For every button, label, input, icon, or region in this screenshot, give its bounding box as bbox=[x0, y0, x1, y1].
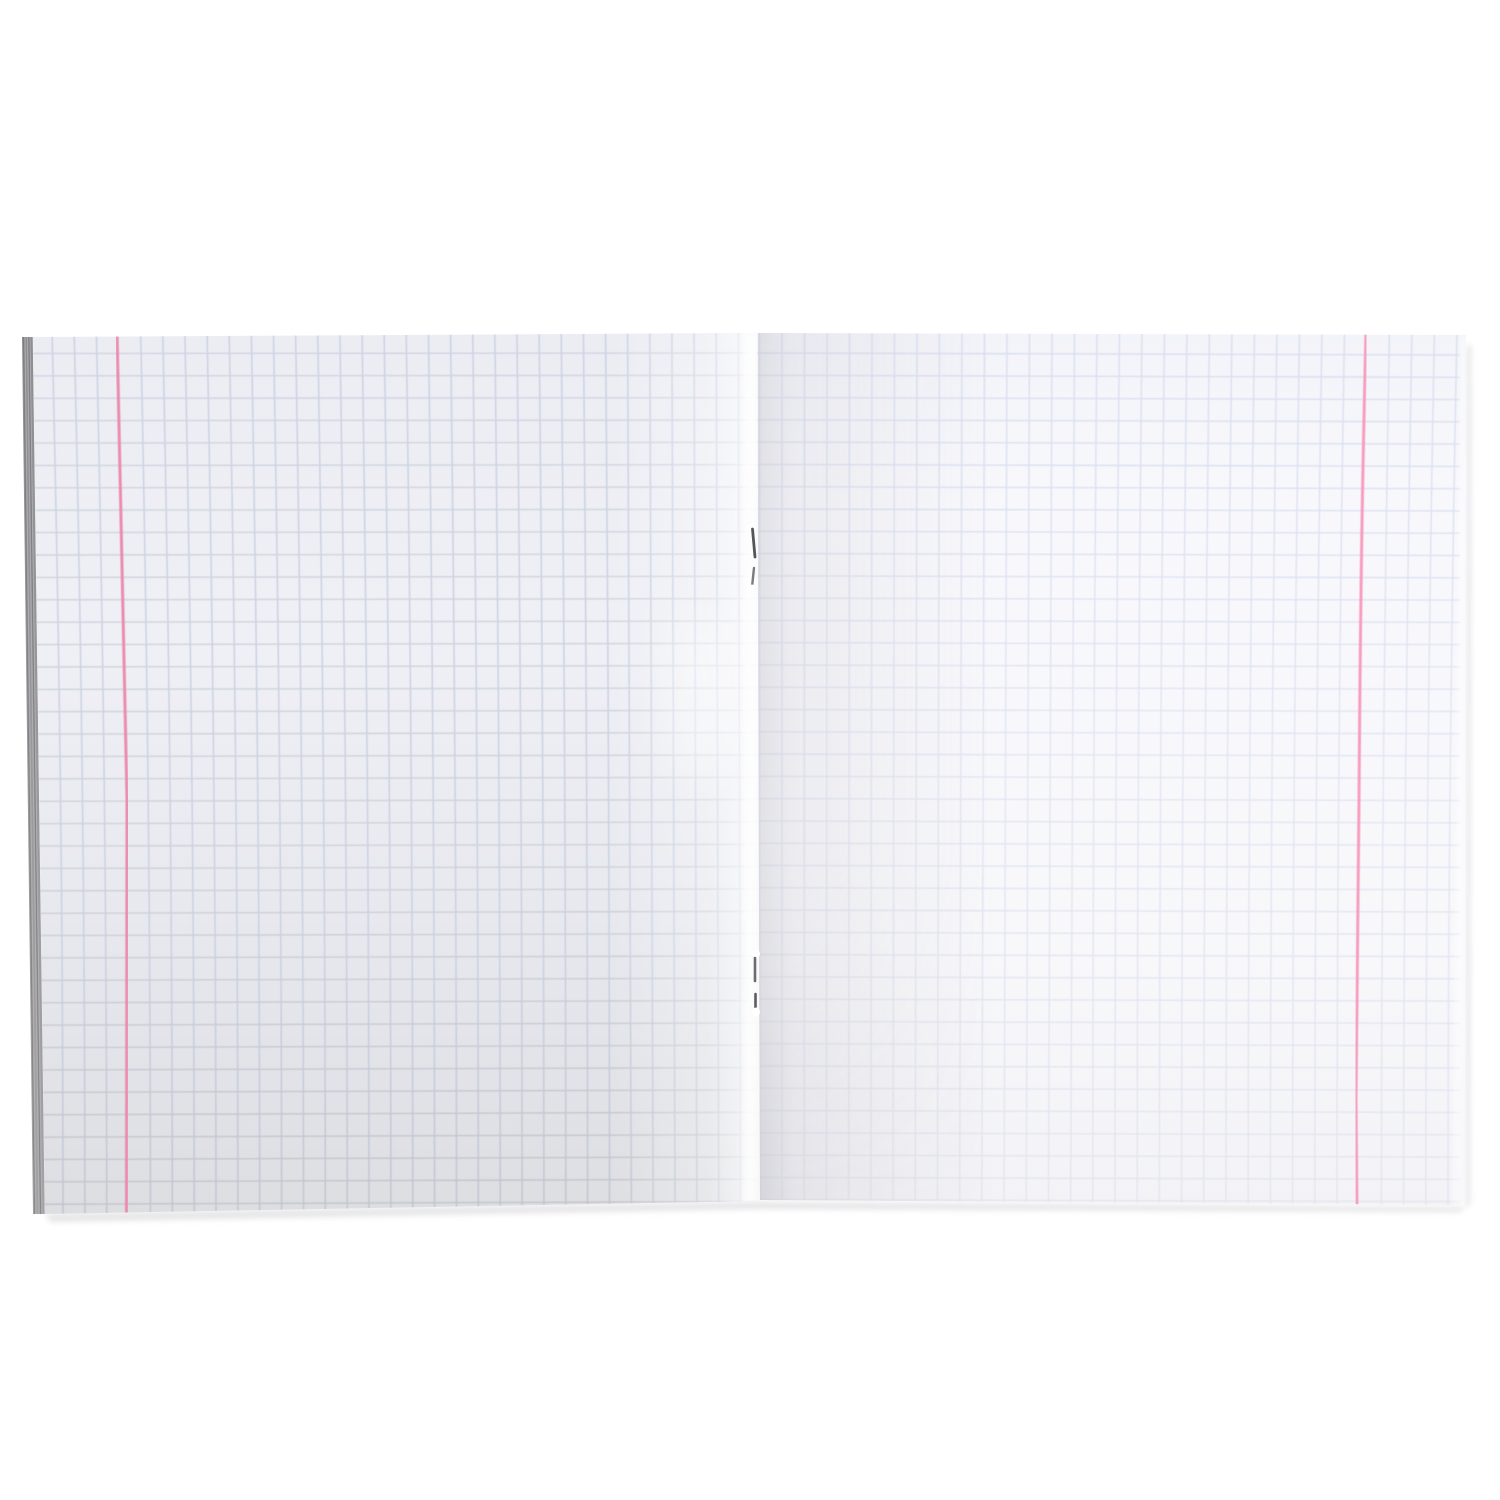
top staple bbox=[749, 524, 756, 592]
gutter highlight bbox=[660, 333, 760, 1202]
right page grid bbox=[757, 330, 1460, 1210]
illustration: open grid-paper notebook bbox=[22, 333, 1472, 1224]
white outer strip bbox=[1452, 335, 1466, 1205]
page stack edge bbox=[22, 337, 46, 1214]
left page margin line bbox=[117, 332, 127, 1220]
gutter shadow on right page bbox=[758, 333, 1018, 1205]
left page bbox=[20, 325, 765, 1220]
left page horizontal grid bbox=[30, 353, 757, 1204]
right page paper bbox=[750, 325, 1475, 1215]
right page margin line bbox=[1356, 330, 1366, 1210]
left page vertical grid bbox=[52, 330, 741, 1220]
right page bbox=[750, 325, 1475, 1215]
left page paper bbox=[20, 325, 765, 1220]
drop shadow under notebook bbox=[45, 345, 1471, 1222]
bottom staple bbox=[752, 950, 760, 1016]
